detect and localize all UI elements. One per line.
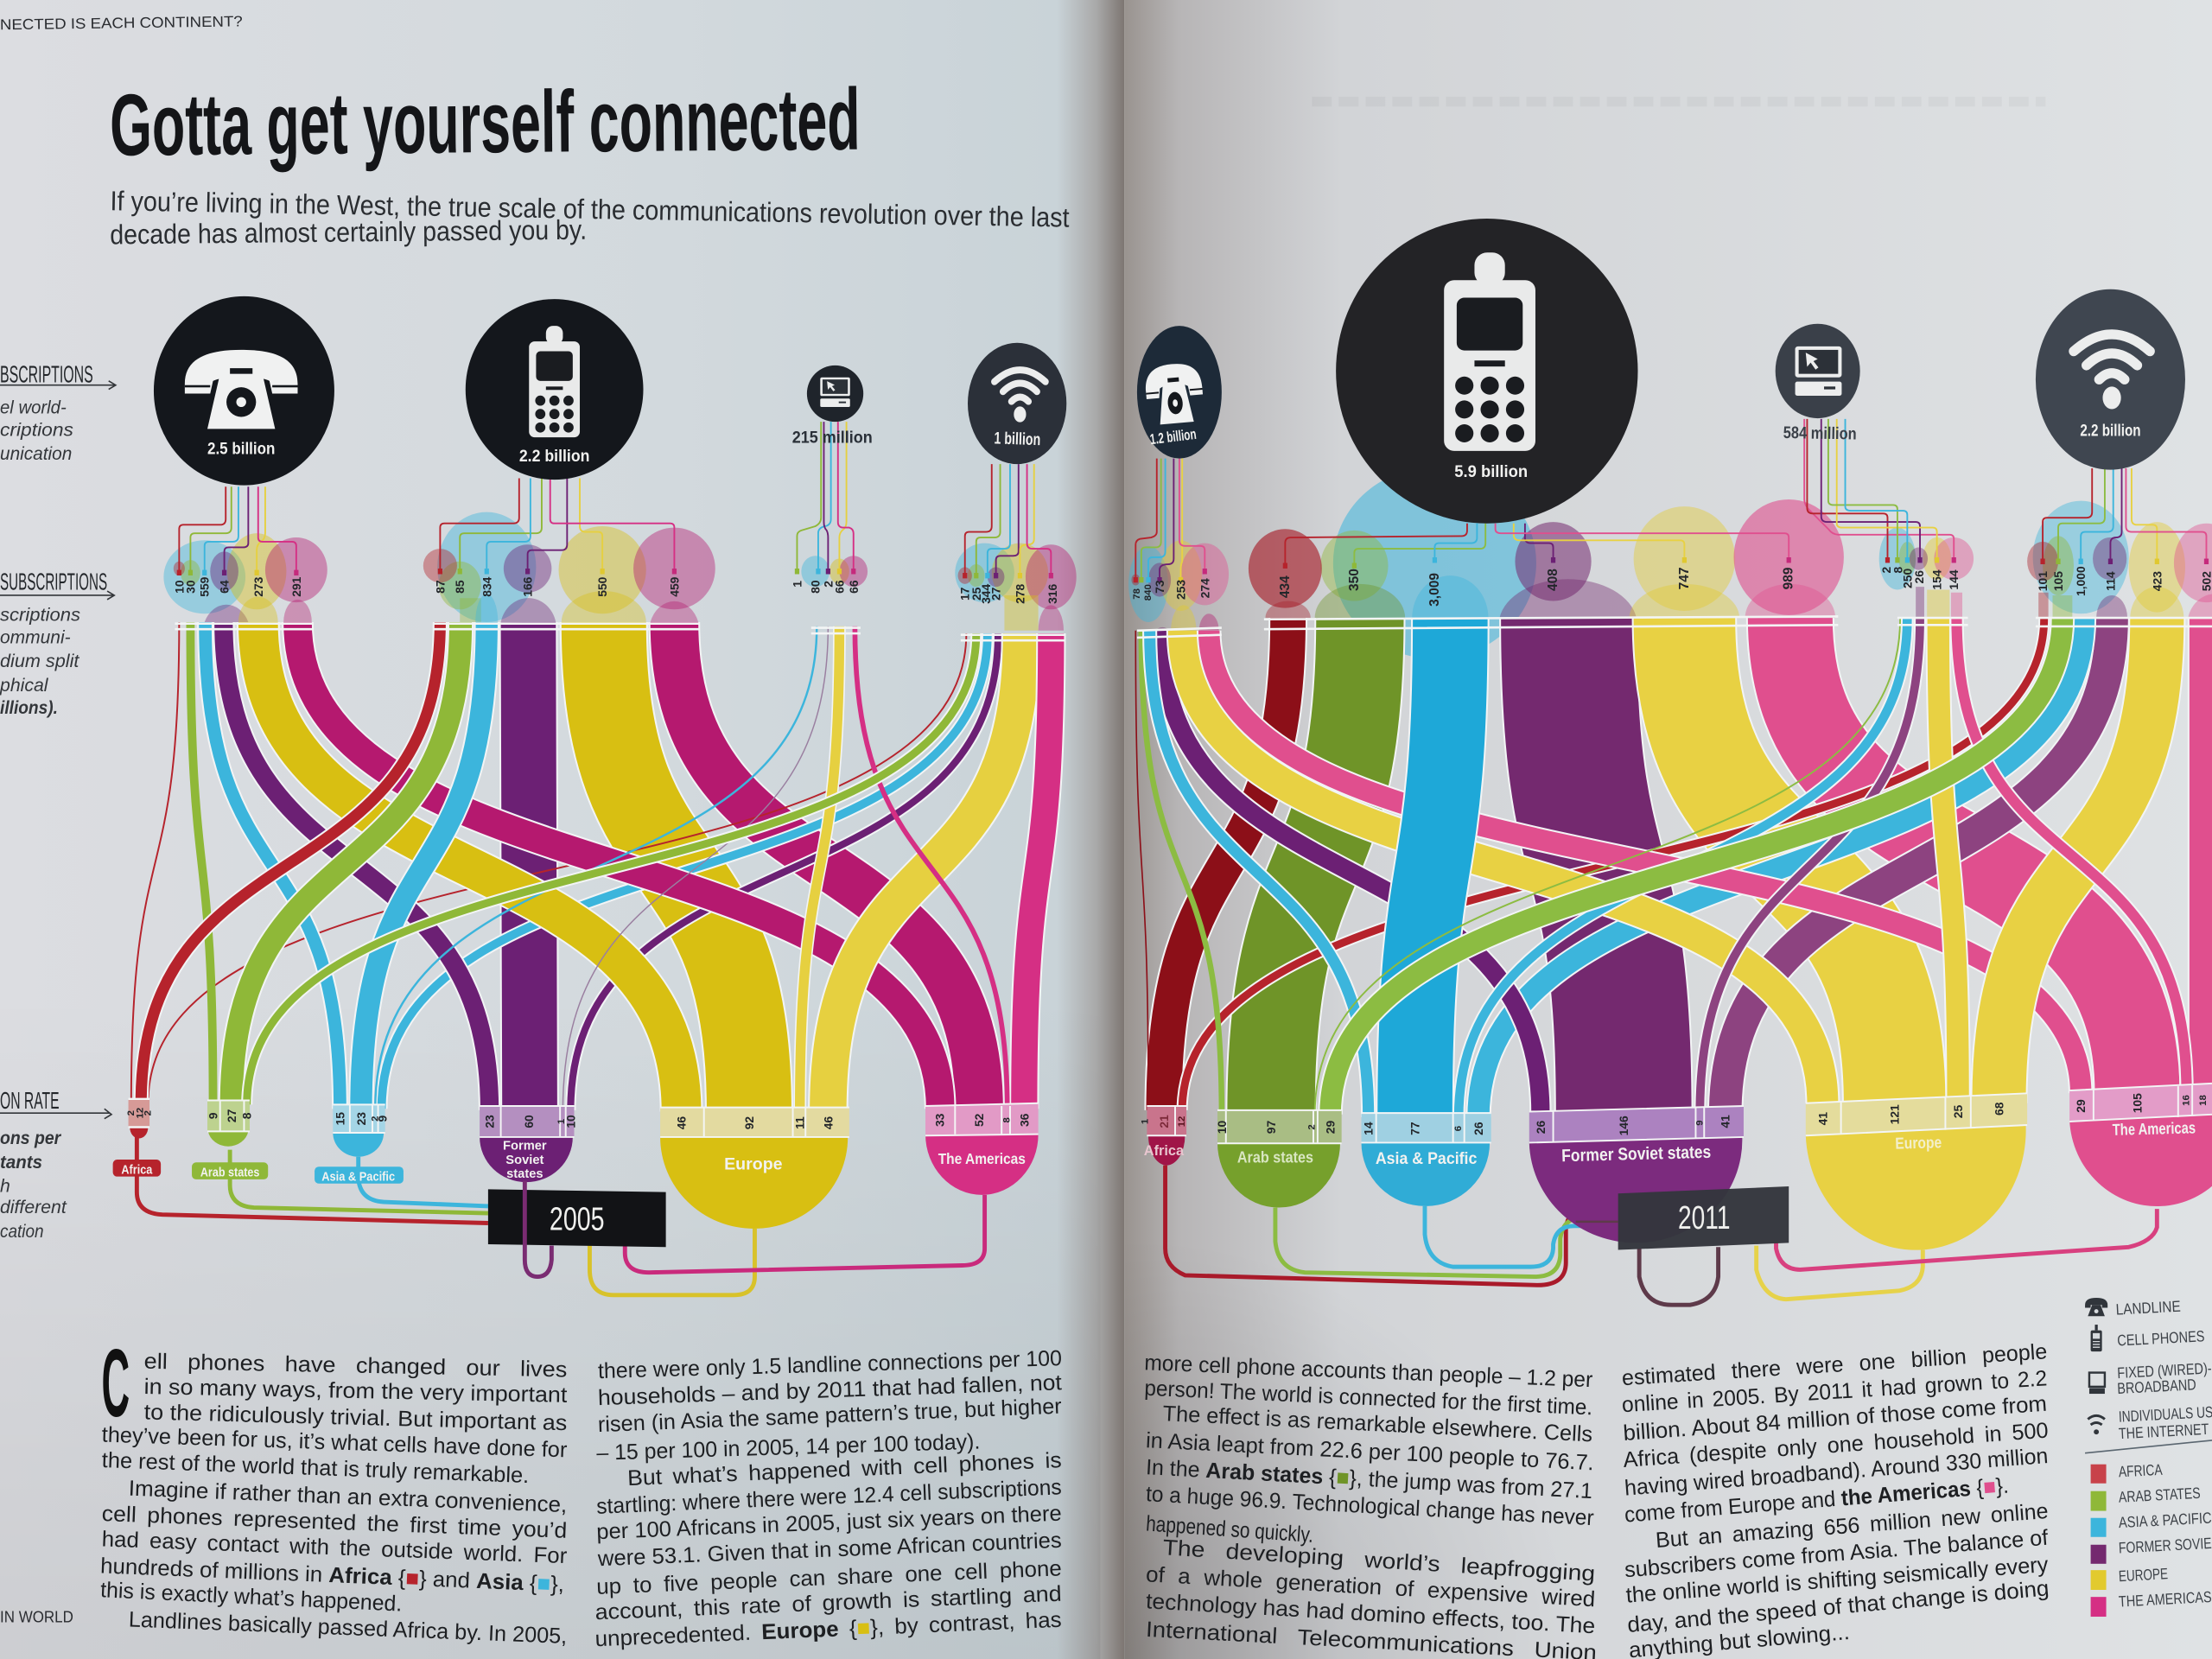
number labels 2011: 73 — [1153, 580, 1166, 594]
body text column 1: in so many ways, from the very important — [143, 1375, 568, 1408]
number labels 2011: 144 — [1947, 569, 1961, 590]
right page background — [1124, 0, 2212, 1659]
number labels 2005: 30 — [183, 580, 197, 594]
icon circle: broadband 2005 — [792, 365, 873, 448]
region Europe 2011: 41 — [1815, 1112, 1829, 1125]
region Asia and Pacific 2005: Asia & Pacific — [321, 1171, 395, 1185]
connector lines 2005 — [179, 422, 1051, 575]
legend: regions: AFRICA — [2118, 1461, 2163, 1480]
region Asia and Pacific 2005: 2 — [370, 1116, 380, 1122]
text: C — [102, 1329, 130, 1437]
region Europe 2011: 121 — [1888, 1104, 1902, 1124]
body text column 4: subscribers come from Asia. The balance of — [1624, 1526, 2050, 1582]
region The Americas 2005: The Americas — [938, 1150, 1026, 1167]
region Former Soviet states 2005: Soviet — [505, 1154, 543, 1167]
icon circle: landline 2005: 2.5 billion — [207, 440, 275, 459]
body text column 3: The developing world’s leapfrogging — [1162, 1535, 1596, 1586]
number labels 2011: 840 — [1143, 584, 1154, 601]
region Arab states 2011: 97 — [1264, 1120, 1278, 1134]
connector lines 2011 — [1135, 419, 2206, 580]
side annotation: penetration rate: different — [0, 1198, 67, 1217]
body text column 3: of a whole generation of expensive wired — [1145, 1562, 1596, 1611]
number labels 2005: 559 — [198, 576, 212, 597]
side annotation: regional subscriptions: dium split — [0, 652, 80, 671]
year box 2005 — [488, 1181, 666, 1277]
icon circle: broadband 2005: 215 million — [792, 429, 873, 448]
region Africa 2005: 12 — [135, 1108, 145, 1119]
region Arab states 2005: 9 — [207, 1112, 220, 1119]
region Africa 2011: Africa — [1144, 1143, 1185, 1159]
icon circle: internet users 2005: 1 billion — [994, 429, 1041, 449]
number labels 2011: 408 — [1546, 569, 1560, 591]
region The Americas 2005 — [625, 1103, 1039, 1273]
region Arab states 2005: 8 — [240, 1112, 254, 1119]
region The Americas 2005: 52 — [972, 1113, 986, 1127]
region Asia and Pacific 2005: 23 — [354, 1112, 368, 1125]
region Former Soviet states 2005: 60 — [522, 1115, 536, 1128]
icon circle: broadband 2011: 584 million — [1783, 423, 1857, 443]
year box 2011 — [1576, 1186, 1789, 1250]
side annotation: regional subscriptions: ommuni- — [0, 627, 71, 647]
region Africa 2005 — [113, 1099, 488, 1224]
number labels 2011: 253 — [1174, 580, 1188, 600]
side annotation: regional subscriptions — [0, 568, 114, 718]
body text column 1 — [100, 1350, 568, 1649]
region Former Soviet states 2011 — [1529, 1106, 1744, 1305]
region Asia and Pacific 2005 — [315, 1104, 488, 1206]
region Africa 2011: 21 — [1157, 1115, 1171, 1128]
number labels 2005: 278 — [1013, 583, 1027, 604]
number labels 2011: 989 — [1782, 567, 1796, 589]
number labels 2005 — [172, 576, 1059, 604]
pale domes 2011 — [1155, 575, 2212, 631]
top rules 2011 — [1137, 616, 2212, 638]
side annotation: penetration rate: ON RATE — [0, 1087, 60, 1114]
side annotation: regional subscriptions: scriptions — [0, 605, 80, 625]
side annotation: total subscriptions: el world- — [0, 397, 67, 417]
number labels 2011: 1,000 — [2074, 566, 2088, 596]
body text column 2: account, this rate of growth is startling and — [594, 1582, 1062, 1624]
number labels 2011: 350 — [1347, 569, 1362, 591]
body text column 3: happened so quickly. — [1145, 1511, 1314, 1548]
body text column 1: this is exactly what’s happened. — [100, 1578, 403, 1617]
region Former Soviet states 2011: 26 — [1534, 1120, 1548, 1134]
number labels 2011: 434 — [1278, 575, 1293, 598]
number labels 2005: 1 — [790, 581, 804, 588]
number labels 2005: 17 — [958, 587, 972, 601]
ribbons 2011 — [1135, 618, 2212, 1117]
body text column 1: the rest of the world that is truly remarkable. — [101, 1448, 530, 1488]
body text column 3: person! The world is connected for the first time. — [1144, 1376, 1593, 1420]
icon circle: cell phones 2005: 2.2 billion — [519, 447, 589, 466]
region Africa 2011 — [1141, 1106, 1618, 1285]
region Africa 2005: 2 — [126, 1110, 137, 1116]
region Europe 2005: 92 — [742, 1116, 756, 1129]
icon circle: landline 2011: 1.2 billion — [1149, 425, 1198, 448]
region The Americas 2005: 33 — [932, 1113, 946, 1127]
region Former Soviet states 2011: 41 — [1719, 1115, 1732, 1128]
region Former Soviet states 2005: Former — [503, 1140, 547, 1154]
region Europe 2005 — [589, 1108, 849, 1295]
body text column 2: unprecedented. Europe {■}, by contrast, has — [594, 1608, 1062, 1651]
body text column 3: to a huge 96.9. Technological change has never — [1145, 1482, 1594, 1530]
number labels 2011: 423 — [2150, 571, 2164, 591]
number labels 2005: 66 — [847, 580, 861, 594]
body text column 2: up to five people can share one cell phone — [596, 1556, 1062, 1599]
body text column 3: more cell phone accounts than people – 1.2 per — [1144, 1351, 1593, 1392]
region Arab states 2011: Arab states — [1237, 1147, 1313, 1166]
side annotation: penetration rate: ons per — [0, 1128, 62, 1148]
number labels 2011: 154 — [1930, 569, 1944, 590]
body text column 3: The effect is as remarkable elsewhere. Cells — [1162, 1402, 1593, 1446]
side annotation: total subscriptions: BSCRIPTIONS — [0, 360, 93, 387]
region Former Soviet states 2005: states — [506, 1167, 543, 1181]
number labels 2005: 291 — [289, 576, 303, 597]
region Europe 2005: Europe — [724, 1154, 783, 1173]
number labels 2011: 8 — [1891, 566, 1905, 573]
body text column 3 — [1144, 1351, 1598, 1659]
number labels 2005: 316 — [1046, 583, 1059, 604]
number labels 2005: 25 — [969, 587, 983, 601]
body text column 4: having wired broadband). Around 330 million — [1624, 1444, 2049, 1501]
number labels 2005: 550 — [595, 576, 609, 597]
icon circle: internet users 2005 — [968, 343, 1066, 464]
region Africa 2011: 12 — [1177, 1116, 1187, 1127]
region Asia and Pacific 2011: 14 — [1362, 1122, 1376, 1135]
number labels 2011: 26 — [1912, 570, 1926, 583]
year box 2005: 2005 — [550, 1201, 605, 1237]
legend: regions: EUROPE — [2118, 1565, 2169, 1585]
body text column 3: in Asia leapt from 22.6 per 100 people to 76.7. — [1145, 1428, 1594, 1475]
region Arab states 2011 — [1215, 1110, 1618, 1277]
number labels 2005: 10 — [172, 580, 186, 594]
side annotation: penetration rate: h — [0, 1177, 10, 1197]
body text column 1: had easy contact with the outside world. For — [101, 1527, 568, 1568]
number labels 2005: 2 — [821, 581, 835, 588]
region Former Soviet states 2005 — [480, 1106, 577, 1182]
body text column 1: ell phones have changed our lives — [143, 1350, 568, 1382]
region Asia and Pacific 2011: 77 — [1408, 1122, 1422, 1135]
number labels 2011: 3,009 — [1427, 573, 1442, 607]
body text column 2: But what’s happened with cell phones is — [627, 1448, 1062, 1491]
pale circles 2005 — [163, 512, 1077, 622]
icon circle: internet users 2011 — [2036, 289, 2185, 470]
side annotation: regional subscriptions: illions). — [0, 698, 58, 718]
body text column 2: per 100 Africans in 2005, just six years on there — [596, 1502, 1062, 1544]
year box 2011: 2011 — [1678, 1199, 1730, 1236]
region Asia and Pacific 2011: 6 — [1453, 1126, 1464, 1131]
number labels 2005: 80 — [809, 580, 823, 594]
region Africa 2005: Africa — [121, 1163, 153, 1177]
region The Americas 2011: 105 — [2130, 1093, 2144, 1113]
icon circle: landline 2005 — [154, 296, 334, 486]
region The Americas 2011: 29 — [2074, 1099, 2088, 1113]
side annotation: total subscriptions: unication — [0, 444, 72, 464]
body text column 1: cell phones represented the first time you’d — [101, 1502, 568, 1543]
body text column 4: the online world is shifting seismically every — [1625, 1553, 2050, 1608]
number labels 2011: 2 — [1879, 566, 1893, 573]
region Africa 2011: 1 — [1141, 1118, 1151, 1124]
number labels 2011: 105 — [2051, 571, 2065, 591]
body text column 1: Imagine if rather than an extra convenience, — [128, 1477, 568, 1517]
region Europe 2011: Europe — [1895, 1133, 1942, 1153]
body text column 1: they’ve been for us, it’s what cells have done for — [101, 1423, 568, 1462]
region Arab states 2011: 2 — [1306, 1124, 1317, 1130]
number labels 2005: 85 — [453, 580, 467, 594]
panel: 2011 chart — [1128, 219, 2212, 1305]
body text column 4 — [1621, 1339, 2050, 1659]
icon circle: cell phones 2011: 5.9 billion — [1454, 462, 1528, 481]
region Asia and Pacific 2011: 26 — [1471, 1122, 1485, 1135]
side annotation: penetration rate: tants — [0, 1153, 42, 1173]
body text column 3: In the Arab states {■}, the jump was from 27.1 — [1145, 1455, 1593, 1503]
number labels 2011: 250 — [1900, 569, 1914, 588]
region Europe 2011: 68 — [1992, 1102, 2005, 1116]
number labels 2005: 66 — [832, 580, 846, 594]
region Former Soviet states 2005: 1 — [556, 1118, 567, 1124]
side annotation: total subscriptions: criptions — [0, 420, 73, 440]
region Asia and Pacific 2011: Asia & Pacific — [1376, 1149, 1477, 1168]
top rules 2005 — [175, 624, 1065, 640]
side annotation: penetration rate: cation — [0, 1222, 44, 1242]
number labels 2005: 273 — [251, 576, 265, 597]
number labels 2005: 27 — [989, 587, 1003, 601]
body text column 1: Landlines basically passed Africa by. In 2005, — [128, 1607, 568, 1649]
body text column 4: But an amazing 656 million new online — [1655, 1499, 2049, 1553]
number labels 2011: 114 — [2103, 571, 2117, 591]
legend — [2085, 1298, 2212, 1617]
region Europe 2005: 11 — [793, 1116, 807, 1129]
legend: regions — [2091, 1461, 2212, 1617]
body text column 4: come from Europe and the Americas {■}. — [1624, 1474, 2010, 1528]
number labels 2011 — [1132, 566, 2212, 607]
icon circle: internet users 2011: 2.2 billion — [2080, 421, 2141, 440]
number labels 2011: 101 — [2036, 571, 2050, 591]
body text column 4: billion. About 84 million of those come from — [1623, 1392, 2048, 1446]
body text column 4: estimated there were one billion people — [1621, 1339, 2048, 1390]
intro text: If you’re living in the West, the true scale of the communications revolution over the last — [110, 185, 1070, 233]
number labels 2011: 747 — [1677, 567, 1692, 589]
number labels 2011: 78 — [1132, 588, 1142, 600]
body text column 4: Africa (despite only one household in 500 — [1623, 1419, 2049, 1472]
region Arab states 2011: 10 — [1215, 1120, 1229, 1134]
region Arab states 2011: 29 — [1324, 1120, 1338, 1134]
region The Americas 2011 — [1777, 1084, 2212, 1269]
region Former Soviet states 2011: Former Soviet states — [1561, 1143, 1712, 1166]
region Asia and Pacific 2011 — [1362, 1113, 1618, 1267]
page header: NECTED IS EACH CONTINENT? — [0, 12, 243, 33]
number labels 2005: 834 — [480, 576, 493, 597]
ribbons 2005 — [131, 622, 1051, 1112]
body text column 2: risen (in Asia the same pattern’s true, but higher — [597, 1395, 1062, 1437]
region Europe 2005: 46 — [821, 1116, 835, 1129]
region Arab states 2005: 27 — [225, 1109, 238, 1122]
number labels 2005: 459 — [667, 576, 681, 597]
number labels 2005: 87 — [433, 580, 447, 594]
legend: media types: LANDLINE — [2115, 1298, 2181, 1319]
body text column 2: were 53.1. Given that in some African countries — [596, 1529, 1062, 1571]
body text column 2: there were only 1.5 landline connections per 100 — [598, 1346, 1062, 1383]
region Europe 2005: 46 — [675, 1116, 689, 1129]
legend: media types — [2085, 1298, 2212, 1442]
region The Americas 2005: 36 — [1017, 1113, 1031, 1127]
region Europe 2011 — [1757, 1093, 2027, 1300]
icon circle: broadband 2011 — [1776, 324, 1860, 443]
icon circle: cell phones 2011 — [1336, 219, 1638, 524]
panel: 2005 chart — [113, 296, 1077, 1295]
region The Americas 2011: 16 — [2182, 1095, 2192, 1106]
title: Gotta get yourself connected — [110, 71, 861, 175]
side annotation: penetration rate — [0, 1087, 111, 1242]
left page background — [0, 0, 1124, 1659]
icon circle: landline 2011 — [1137, 326, 1222, 459]
number labels 2005: 166 — [521, 576, 535, 597]
pale circles 2011 — [1128, 467, 2212, 658]
pale domes 2005 — [205, 591, 1064, 631]
body text column 3: technology has had domino effects, too. The — [1145, 1589, 1596, 1638]
region Former Soviet states 2011: 9 — [1694, 1120, 1705, 1126]
region Africa 2005: 2 — [143, 1110, 153, 1116]
body text column 2 — [594, 1346, 1062, 1651]
side annotation: total subscriptions — [0, 360, 116, 464]
number labels 2005: 344 — [979, 583, 993, 604]
side annotation: regional subscriptions: phical — [0, 676, 49, 696]
region Asia and Pacific 2005: 9 — [375, 1116, 389, 1122]
body text column 1: to the ridiculously trivial. But important as — [143, 1400, 568, 1435]
number labels 2005: 64 — [218, 580, 232, 594]
body text column 4: day, and the speed of that change is doing — [1626, 1576, 2050, 1637]
intro text: decade has almost certainly passed you by. — [110, 214, 587, 250]
body text column 2: – 15 per 100 in 2005, 14 per 100 today). — [596, 1430, 981, 1465]
body text column 2: startling: where there were 12.4 cell subscriptions — [596, 1475, 1062, 1519]
region Arab states 2005: Arab states — [200, 1166, 259, 1180]
region Former Soviet states 2005: 10 — [563, 1115, 577, 1128]
body text column 4: online in 2005. By 2011 it had grown to 2.2 — [1621, 1366, 2048, 1417]
region Arab states 2005 — [192, 1100, 488, 1213]
region Former Soviet states 2005: 23 — [483, 1115, 497, 1128]
number labels 2011: 274 — [1198, 578, 1211, 598]
body text column 2: households – and by 2011 that had fallen, not — [598, 1370, 1062, 1410]
region Former Soviet states 2011: 146 — [1617, 1116, 1630, 1135]
region The Americas 2011: 18 — [2198, 1095, 2209, 1106]
region The Americas 2005: 8 — [1002, 1117, 1013, 1122]
region Europe 2011: 25 — [1951, 1105, 1965, 1118]
body text column 1: hundreds of millions in Africa {■} and Asia {■}, — [100, 1554, 565, 1597]
region Asia and Pacific 2005: 15 — [333, 1112, 346, 1125]
side annotation: regional subscriptions: SUBSCRIPTIONS — [0, 568, 107, 594]
footer tag: IN WORLD — [0, 1608, 73, 1626]
icon circle: cell phones 2005 — [466, 299, 643, 480]
